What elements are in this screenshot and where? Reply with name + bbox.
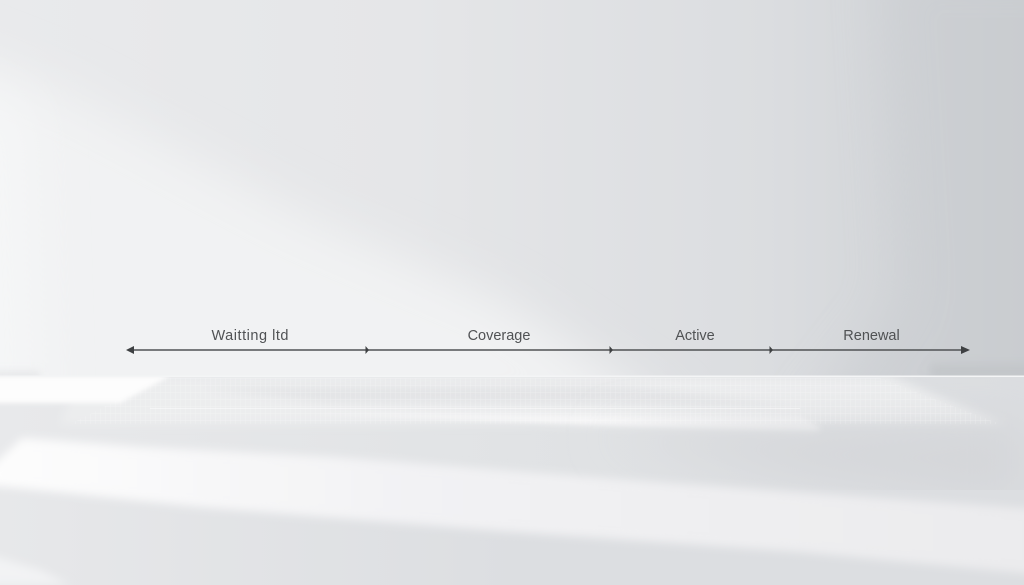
axis line [130, 349, 966, 351]
bright strip at lower edge of grid [498, 417, 698, 425]
soft shadows within the lit area [342, 392, 648, 398]
label: coverage: Coverage [468, 328, 530, 344]
arrow: right end [961, 346, 970, 354]
tick: waiting to coverage [366, 346, 369, 354]
tick: coverage to active [610, 346, 613, 354]
floor edge highlight [0, 376, 1024, 377]
label: active: Active [675, 328, 715, 344]
white patch, top left [0, 376, 170, 403]
long diagonal light band [0, 438, 1024, 574]
floor surface with light bands [0, 376, 1024, 585]
soft shadow below the band [0, 490, 1024, 585]
lit area behind the grid [294, 377, 981, 422]
tick: active to renewal [770, 346, 773, 354]
wall background with diagonal light [0, 0, 1024, 376]
shadow on the right [698, 417, 968, 434]
label: waiting: Waitting ltd [212, 328, 288, 344]
floor grid [245, 378, 996, 424]
arrow: left end [126, 346, 134, 354]
light corner bottom left [0, 562, 52, 582]
timeline [126, 328, 970, 354]
label: renewal: Renewal [843, 328, 900, 344]
